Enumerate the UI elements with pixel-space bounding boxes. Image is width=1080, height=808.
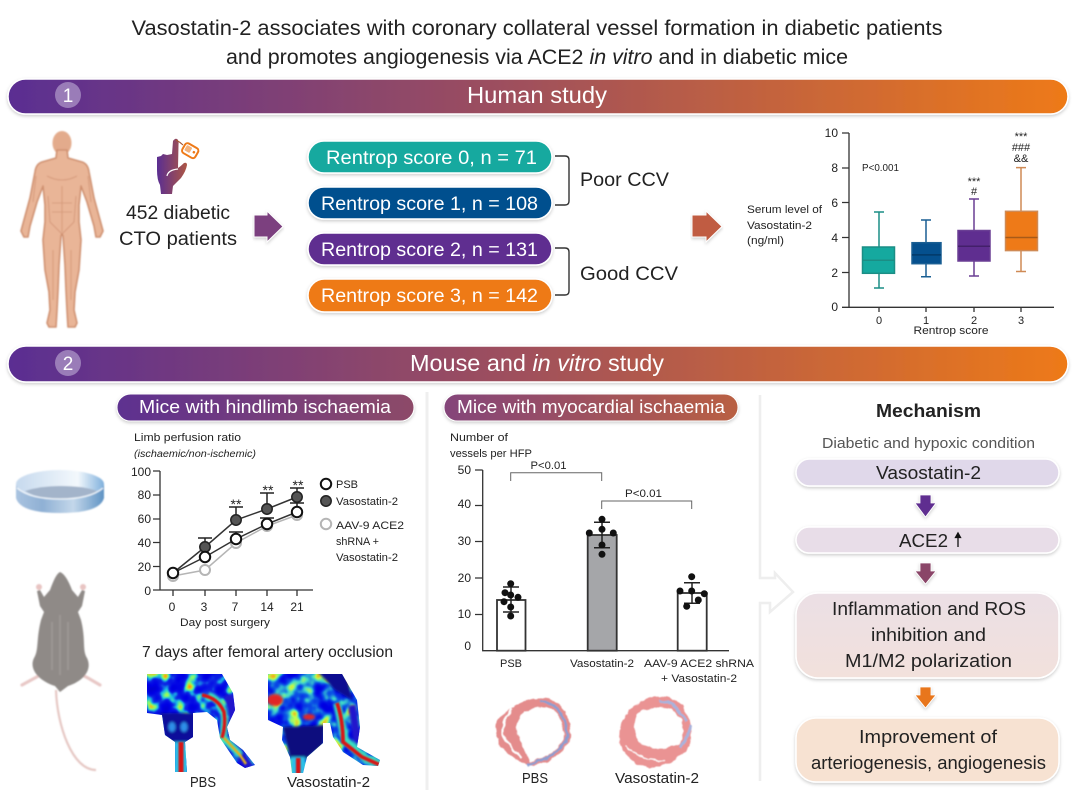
bar: AAV-9 ACE2 shRNA + Vasostatin-2 (676, 573, 708, 651)
box plot: serum Vasostatin-2 by Rentrop score: 1 (923, 315, 929, 327)
category labels: AAV-9 ACE2 shRNA (644, 658, 755, 670)
arrow: plum (915, 563, 936, 584)
section banner: human study (8, 79, 1068, 114)
line chart: limb perfusion ratio: Day post surgery (180, 617, 271, 629)
panel heading (117, 394, 414, 421)
significance brackets (511, 460, 692, 509)
significance marks: # (971, 186, 978, 198)
section banner: mouse and in vitro study: 2 (63, 354, 73, 375)
box plot: serum Vasostatin-2 by Rentrop score: 4 (831, 231, 838, 245)
significance marks: *** (968, 176, 981, 188)
box: inflammation: Inflammation and ROS (832, 598, 1026, 619)
line chart: limb perfusion ratio: 20 (138, 560, 151, 574)
box: improvement (796, 718, 1059, 782)
arrow: patients to scores (254, 211, 283, 242)
box plot: serum Vasostatin-2 by Rentrop score: P<0.001 (862, 162, 899, 174)
patient count (119, 203, 237, 250)
pill: Rentrop score 3 (308, 279, 552, 312)
significance marks: ** (231, 496, 242, 512)
label: PBS (522, 770, 548, 787)
icon: mouse (22, 572, 100, 770)
box plot: serum Vasostatin-2 by Rentrop score: 2 (831, 266, 838, 280)
box plot: serum Vasostatin-2 by Rentrop score: Rentrop score (914, 325, 988, 337)
condition label: Diabetic and hypoxic condition (822, 435, 1035, 452)
bar chart: vessels per HFP: 10 (458, 607, 471, 621)
significance marks: ### (1012, 142, 1031, 154)
line chart: limb perfusion ratio (131, 432, 404, 629)
bar chart: vessels per HFP: 30 (458, 534, 471, 548)
category labels: + Vasostatin-2 (661, 673, 737, 685)
caption: femoral artery occlusion: 7 days after femoral artery occlusion (142, 644, 393, 661)
legend: Vasostatin-2 (336, 552, 398, 564)
line chart: limb perfusion ratio: Limb perfusion ratio (134, 432, 241, 444)
y axis label (747, 204, 823, 247)
significance brackets: P<0.01 (530, 460, 566, 472)
box plot: serum Vasostatin-2 by Rentrop score: 0 (831, 300, 838, 314)
series: AAV-9 ACE2 shRNA + Vasostatin-2 (168, 510, 302, 581)
significance marks: ** (293, 477, 304, 493)
perfusion image: PBS (147, 674, 255, 787)
legend (321, 479, 404, 564)
section banner: human study: 1 (63, 86, 73, 107)
y axis label: Serum level of (747, 204, 823, 216)
arrow: scores to box plot (692, 211, 722, 242)
label: Vasostatin-2 (615, 770, 699, 787)
y axis label: Vasostatin-2 (747, 220, 812, 232)
human body figure (21, 131, 103, 327)
heart section: Vasostatin-2 (615, 696, 699, 787)
box plot: serum Vasostatin-2 by Rentrop score (747, 126, 1054, 337)
legend: PSB (336, 479, 358, 491)
line chart: limb perfusion ratio: 60 (138, 512, 151, 526)
box plot: serum Vasostatin-2 by Rentrop score: 10 (825, 126, 838, 140)
bar chart: vessels per HFP: Number of (450, 432, 509, 444)
line chart: limb perfusion ratio: 7 (232, 600, 239, 614)
patient count: 452 diabetic (126, 203, 230, 224)
bar chart: vessels per HFP: vessels per HFP (450, 448, 532, 460)
box 3 (1006, 168, 1038, 272)
box plot: serum Vasostatin-2 by Rentrop score: 0 (876, 315, 882, 327)
box: ACE2: ACE2 (899, 530, 948, 551)
line chart: limb perfusion ratio: (ischaemic/non-ischemic) (134, 449, 256, 460)
bar chart: vessels per HFP (450, 432, 755, 685)
title: Vasostatin-2 associates with coronary collateral vessel formation in diabetic patients (132, 17, 942, 40)
mechanism heading: Mechanism (876, 401, 981, 421)
box 0 (862, 212, 894, 288)
box: improvement: arteriogenesis, angiogenesis (811, 752, 1046, 773)
significance marks: ** (263, 482, 274, 498)
title (132, 17, 942, 69)
category labels: Vasostatin-2 (570, 658, 634, 670)
panel: myocardial ischaemia (444, 394, 755, 787)
line chart: limb perfusion ratio: 100 (131, 465, 151, 479)
box plot: serum Vasostatin-2 by Rentrop score: 3 (1018, 315, 1024, 327)
bar chart: vessels per HFP: 50 (458, 463, 471, 477)
line chart: limb perfusion ratio: 80 (138, 488, 151, 502)
bar: PSB (497, 580, 526, 651)
box: Vasostatin-2 (796, 459, 1059, 486)
icon: finger prick and glucose meter (157, 139, 199, 194)
section banner: human study: Human study (467, 82, 608, 108)
section banner: mouse and in vitro study: Mouse and in vitro study (410, 350, 664, 376)
pill: Rentrop score 2 (308, 233, 552, 265)
bar chart: vessels per HFP: 40 (458, 497, 471, 511)
series: PSB (168, 503, 304, 578)
line chart: limb perfusion ratio: 0 (169, 600, 176, 614)
box plot: serum Vasostatin-2 by Rentrop score: 8 (831, 161, 838, 175)
significance brackets: P<0.01 (625, 488, 662, 500)
bracket: poor CCV: Poor CCV (580, 169, 669, 191)
panel heading: Mice with hindlimb ischaemia (139, 396, 392, 417)
arrow: results feeding into mechanism (760, 395, 793, 781)
legend: Vasostatin-2 (336, 496, 398, 508)
arrow: orange (915, 687, 936, 708)
patient count: CTO patients (119, 229, 237, 250)
arrow: purple (915, 495, 936, 517)
perfusion image: Vasostatin-2 (268, 674, 380, 787)
series: Vasostatin-2 (173, 488, 304, 573)
label: Vasostatin-2 (287, 774, 370, 791)
significance marks: && (1014, 153, 1029, 165)
box: improvement: Improvement of (859, 726, 998, 747)
pill: Rentrop score 2: Rentrop score 2, n = 131 (321, 240, 538, 261)
box: ACE2 (796, 527, 1059, 553)
label: PBS (190, 774, 216, 791)
panel heading: Mice with myocardial ischaemia (457, 396, 726, 417)
line chart: limb perfusion ratio: 40 (138, 536, 151, 550)
bracket: poor CCV (555, 156, 669, 205)
heart section: PBS (495, 698, 570, 787)
category labels: PSB (500, 658, 522, 670)
line chart: limb perfusion ratio: 14 (260, 600, 274, 614)
pill: Rentrop score 1 (308, 187, 552, 219)
y axis label: (ng/ml) (747, 235, 784, 247)
category labels (500, 658, 755, 685)
section banner: mouse and in vitro study (8, 346, 1068, 382)
significance marks: *** (1015, 131, 1028, 143)
legend: shRNA + (336, 536, 379, 548)
panel: hindlimb ischaemia (117, 394, 414, 791)
box 1 (912, 220, 941, 277)
divider between mouse panels (426, 392, 428, 790)
box: inflammation: M1/M2 polarization (845, 650, 1012, 671)
bar: Vasostatin-2 (586, 516, 617, 651)
pill: Rentrop score 0 (308, 141, 552, 173)
legend: AAV-9 ACE2 (336, 520, 404, 532)
panel: mechanism (796, 401, 1059, 782)
title: and promotes angiogenesis via ACE2 in vitro and in diabetic mice (226, 46, 848, 69)
box 2 (958, 199, 990, 276)
panel heading (444, 394, 738, 421)
bracket: good CCV (555, 248, 678, 295)
icon: petri dish (16, 470, 104, 513)
box plot: serum Vasostatin-2 by Rentrop score: 6 (831, 196, 838, 210)
line chart: limb perfusion ratio: 0 (144, 584, 151, 598)
line chart: limb perfusion ratio: 21 (290, 600, 304, 614)
line chart: limb perfusion ratio: 3 (201, 600, 208, 614)
box plot: serum Vasostatin-2 by Rentrop score: 2 (971, 315, 977, 327)
box: inflammation: inhibition and (871, 624, 986, 645)
box: inflammation (796, 593, 1059, 678)
pill: Rentrop score 3: Rentrop score 3, n = 142 (321, 286, 538, 307)
bracket: good CCV: Good CCV (580, 263, 678, 285)
pill: Rentrop score 0: Rentrop score 0, n = 71 (326, 148, 537, 169)
box: Vasostatin-2: Vasostatin-2 (876, 462, 981, 483)
bar chart: vessels per HFP: 0 (464, 639, 471, 653)
bar chart: vessels per HFP: 20 (458, 571, 471, 585)
significance marks (231, 477, 304, 512)
pill: Rentrop score 1: Rentrop score 1, n = 108 (321, 194, 538, 215)
significance marks (968, 131, 1031, 198)
